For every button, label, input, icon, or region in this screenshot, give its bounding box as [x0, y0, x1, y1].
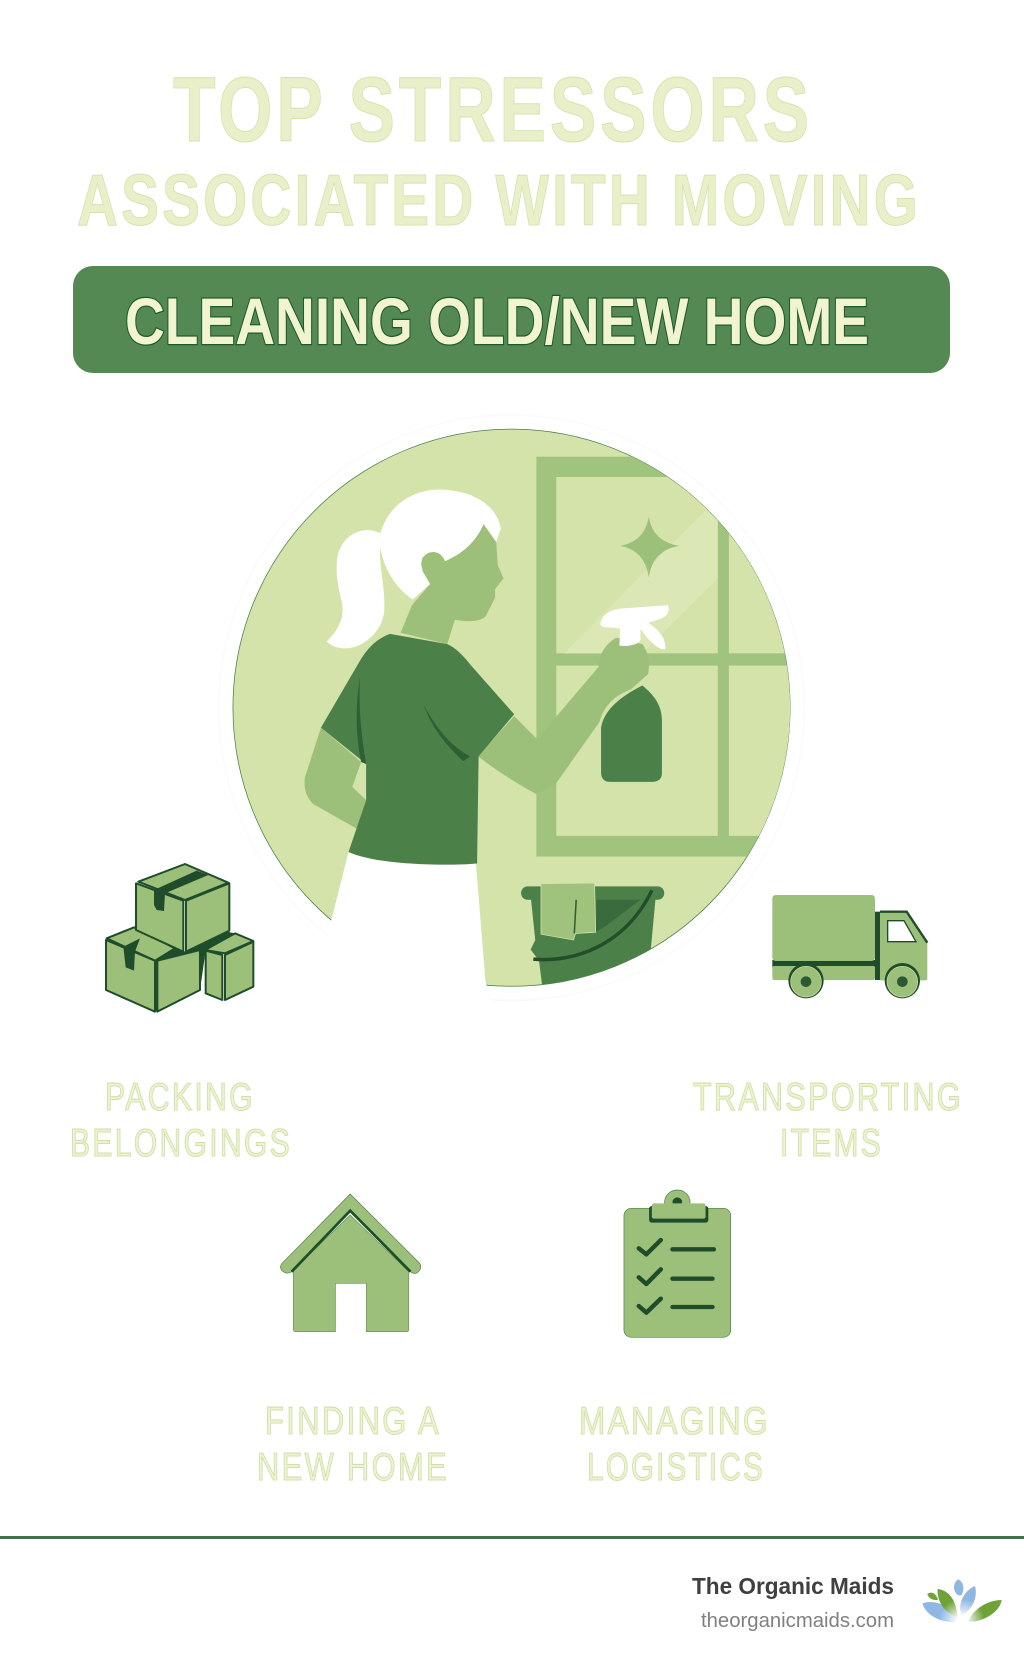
- ear: [421, 552, 445, 576]
- label: packing belongings: [70, 1076, 292, 1165]
- label: packing belongings: PACKING: [105, 1076, 255, 1119]
- logo: lotus leaves: [922, 1579, 1002, 1622]
- label: finding a new home: [257, 1400, 449, 1489]
- label: finding a new home: NEW HOME: [257, 1446, 449, 1489]
- main illustration: woman cleaning a window: [232, 428, 790, 987]
- window: [536, 456, 790, 856]
- banner: cleaning old/new home: CLEANING OLD/NEW HOME: [125, 284, 869, 358]
- back arm: [305, 728, 366, 829]
- banner: cleaning old/new home: [73, 266, 950, 373]
- spray bottle: [600, 605, 669, 782]
- hair and ponytail: [327, 490, 501, 648]
- label: transporting items: [693, 1076, 963, 1165]
- icon: stacked boxes: [106, 864, 253, 1012]
- woman figure: [305, 490, 649, 865]
- label: managing logistics: [579, 1400, 770, 1489]
- label: packing belongings: BELONGINGS: [70, 1122, 292, 1165]
- label: managing logistics: MANAGING: [579, 1400, 770, 1443]
- icon: house: [280, 1194, 421, 1332]
- icon: sparkle: [620, 516, 680, 578]
- front arm and hand: [478, 638, 649, 795]
- label: managing logistics: LOGISTICS: [587, 1446, 765, 1489]
- label: finding a new home: FINDING A: [265, 1400, 441, 1443]
- bucket with cloth: [521, 883, 664, 992]
- shirt: [321, 634, 514, 865]
- title: TOP STRESSORS: [173, 59, 813, 161]
- title: [77, 59, 921, 241]
- footer brand name and url: [692, 1573, 894, 1632]
- label: transporting items: ITEMS: [780, 1122, 883, 1165]
- woman lower body: [309, 852, 493, 1007]
- footer brand name and url: The Organic Maids: [692, 1573, 894, 1599]
- icon: clipboard checklist: [624, 1190, 731, 1337]
- footer divider: [0, 1536, 1024, 1539]
- footer brand name and url: theorganicmaids.com: [701, 1609, 894, 1632]
- icon: truck: [772, 895, 927, 998]
- neck and face: [401, 524, 503, 644]
